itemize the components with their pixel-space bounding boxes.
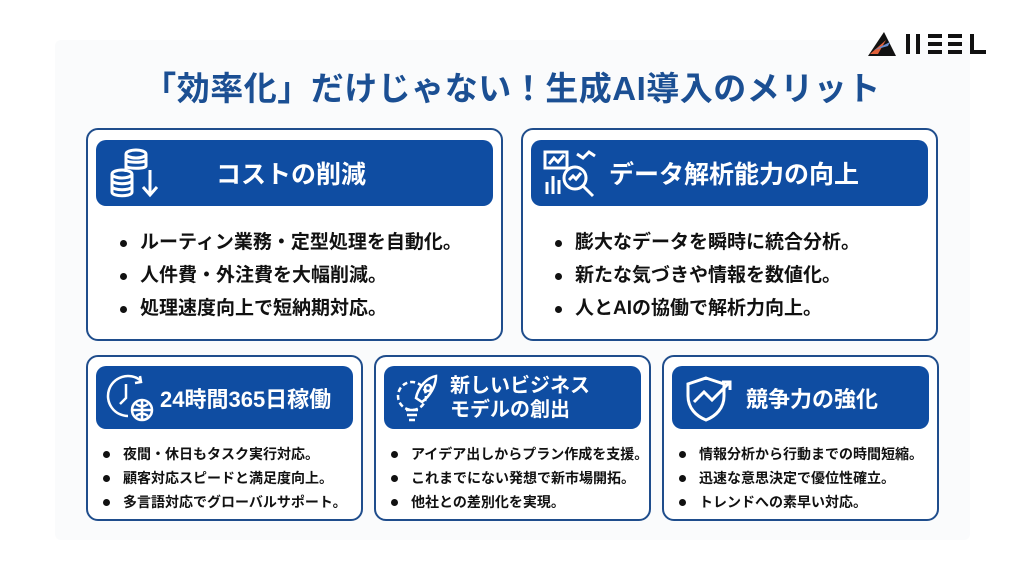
header: cost bbox=[96, 140, 493, 206]
list: competitiveness: 情報分析から行動までの時間短縮。 bbox=[699, 446, 923, 462]
list: new business: 他社との差別化を実現。 bbox=[411, 494, 565, 510]
list: data: 新たな気づきや情報を数値化。 bbox=[575, 265, 841, 286]
list: 24h: 多言語対応でグローバルサポート。 bbox=[123, 494, 347, 510]
header: cost: コストの削減 bbox=[216, 161, 366, 189]
header: 24h bbox=[96, 366, 353, 429]
list: data: 人とAIの協働で解析力向上。 bbox=[575, 298, 822, 319]
list: cost: ルーティン業務・定型処理を自動化。 bbox=[140, 232, 462, 253]
header: data bbox=[531, 140, 928, 206]
icon: shield arrow bbox=[686, 376, 732, 422]
header: competitiveness: 競争力の強化 bbox=[746, 386, 878, 412]
list: new business bbox=[391, 446, 648, 510]
list: competitiveness: 迅速な意思決定で優位性確立。 bbox=[699, 470, 895, 486]
title: 「効率化」だけじゃない！生成AI導入のメリット bbox=[143, 70, 881, 107]
icon: gear bulb rocket bbox=[396, 374, 438, 422]
list: new business: アイデア出しからプラン作成を支援。 bbox=[411, 446, 648, 462]
header: 24h: 24時間365日稼働 bbox=[160, 386, 331, 412]
list: competitiveness bbox=[679, 446, 923, 510]
header: new business: モデルの創出 bbox=[450, 398, 570, 420]
header: competitiveness bbox=[672, 366, 929, 429]
list: 24h bbox=[103, 446, 347, 510]
list: competitiveness: トレンドへの素早い対応。 bbox=[699, 494, 867, 510]
header: data: データ解析能力の向上 bbox=[609, 161, 859, 189]
header: new business: 新しいビジネス bbox=[450, 374, 590, 396]
header: new business bbox=[384, 366, 641, 429]
list: new business: これまでにない発想で新市場開拓。 bbox=[411, 470, 635, 486]
list: data bbox=[555, 232, 860, 319]
logo bbox=[868, 32, 986, 56]
panel: 24/365 bbox=[86, 355, 363, 521]
list: cost: 人件費・外注費を大幅削減。 bbox=[140, 265, 387, 286]
panel: competitiveness bbox=[662, 355, 939, 521]
list: data: 膨大なデータを瞬時に統合分析。 bbox=[575, 232, 860, 253]
panel: new business bbox=[374, 355, 651, 521]
panel: cost reduction bbox=[86, 128, 503, 341]
panel: data analysis bbox=[521, 128, 938, 341]
list: 24h: 夜間・休日もタスク実行対応。 bbox=[123, 446, 319, 462]
icon: chart magnifier bbox=[544, 150, 596, 197]
list: cost: 処理速度向上で短納期対応。 bbox=[140, 298, 387, 319]
icon: clock globe bbox=[106, 374, 154, 422]
icon: coins bbox=[110, 148, 158, 198]
list: cost bbox=[120, 232, 462, 319]
list: 24h: 顧客対応スピードと満足度向上。 bbox=[123, 470, 333, 486]
